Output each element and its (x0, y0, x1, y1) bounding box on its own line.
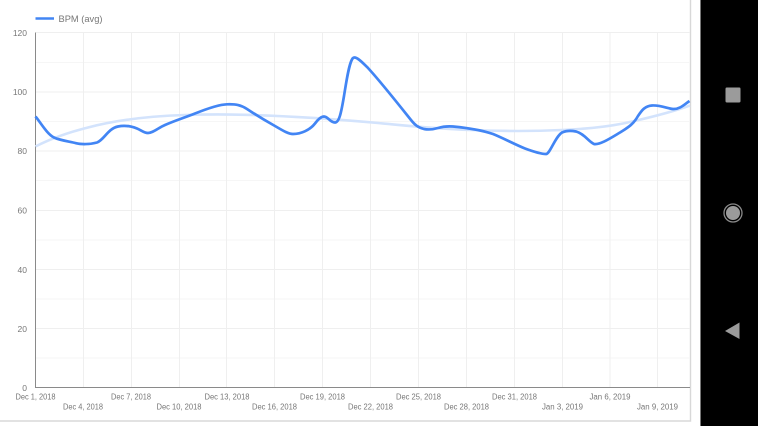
y axis labels: 0 (22, 383, 27, 393)
x axis labels: Dec 22, 2018 (348, 402, 394, 412)
y axis labels: 40 (18, 265, 27, 275)
axes (36, 32, 690, 388)
y axis labels: 120 (13, 28, 27, 38)
x axis labels (16, 392, 679, 412)
x axis labels: Jan 6, 2019 (590, 392, 631, 402)
y axis labels: 80 (18, 146, 27, 156)
x axis labels: Dec 25, 2018 (396, 392, 442, 402)
major gridlines (36, 32, 690, 387)
x axis labels: Jan 3, 2019 (542, 402, 584, 412)
trend line (36, 106, 690, 146)
x axis labels: Dec 31, 2018 (492, 392, 538, 402)
x axis labels: Dec 28, 2018 (444, 402, 490, 412)
x axis labels: Jan 9, 2019 (637, 402, 679, 412)
data line: BPM average (36, 58, 690, 154)
x axis labels: Dec 13, 2018 (204, 392, 250, 402)
x axis labels: Dec 10, 2018 (156, 402, 202, 412)
x axis labels: Dec 7, 2018 (111, 392, 152, 402)
y axis labels: 60 (18, 206, 27, 216)
icon: home circle (724, 204, 742, 222)
y axis labels (13, 28, 27, 393)
y axis labels: 20 (18, 324, 27, 334)
x axis labels: Dec 4, 2018 (63, 402, 104, 412)
x axis labels: Dec 16, 2018 (252, 402, 298, 412)
icon: back triangle (725, 322, 740, 339)
x axis labels: Dec 19, 2018 (300, 392, 346, 402)
legend (36, 14, 102, 24)
icon: recents square (726, 88, 740, 102)
legend: BPM (avg) (58, 14, 102, 24)
minor gridlines (36, 62, 690, 358)
y axis labels: 100 (13, 87, 27, 97)
x axis labels: Dec 1, 2018 (16, 392, 56, 402)
panel: android navigation bar (700, 0, 758, 426)
